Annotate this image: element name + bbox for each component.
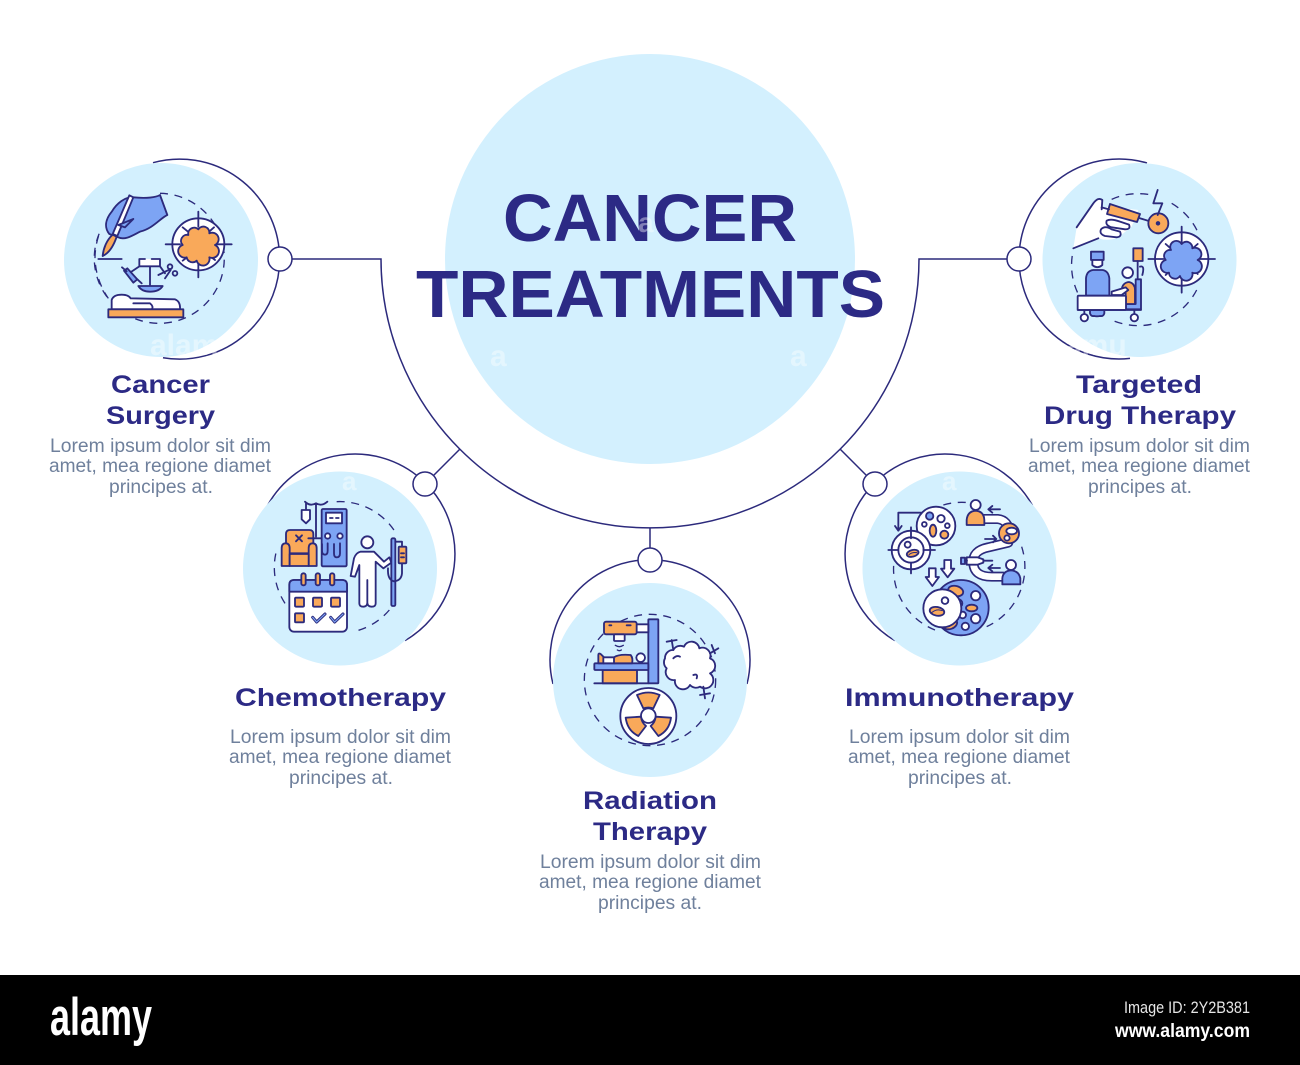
node: immunotherapy — [863, 472, 887, 496]
heading: cancer surgery: Cancer — [111, 371, 210, 399]
ring: cancer surgery — [153, 159, 280, 359]
icon: surgery — [94, 193, 232, 323]
ring: immunotherapy — [845, 454, 1032, 641]
node: chemotherapy — [413, 472, 437, 496]
watermark marks: a — [638, 207, 654, 238]
text block: radiation therapy: Lorem ipsum dolor sit dim — [540, 852, 761, 873]
text block: targeted drug therapy: Lorem ipsum dolor sit dim — [1029, 436, 1250, 457]
node: cancer surgery — [268, 247, 292, 271]
text block: radiation therapy: principes at. — [598, 893, 702, 914]
ring: targeted drug therapy — [1019, 159, 1147, 359]
heading: targeted drug therapy: Targeted — [1076, 371, 1202, 399]
text block: chemotherapy: Lorem ipsum dolor sit dim — [230, 727, 451, 748]
panel: targeted drug therapy — [1007, 159, 1251, 498]
watermark marks — [150, 207, 1127, 496]
watermark marks: a — [490, 340, 507, 373]
connector arc with branches — [292, 259, 1007, 548]
text block: radiation therapy — [539, 852, 762, 914]
text block: targeted drug therapy — [1028, 436, 1251, 498]
text block: immunotherapy: amet, mea regione diamet — [848, 747, 1071, 768]
icon: immunotherapy — [888, 500, 1025, 635]
badge: immunotherapy — [862, 472, 1056, 666]
title — [416, 181, 885, 332]
title: TREATMENTS — [416, 257, 885, 332]
heading: immunotherapy: Immunotherapy — [845, 684, 1074, 712]
badge: radiation therapy — [553, 583, 747, 777]
icon: targeted therapy — [1072, 190, 1215, 326]
watermark marks: amu — [1065, 329, 1127, 362]
node: radiation therapy — [638, 548, 662, 572]
heading: cancer surgery — [106, 371, 215, 430]
text block: immunotherapy: Lorem ipsum dolor sit dim — [849, 727, 1070, 748]
text block: cancer surgery: Lorem ipsum dolor sit dim — [50, 436, 271, 457]
text block: targeted drug therapy: amet, mea regione diamet — [1028, 456, 1251, 477]
badge: cancer surgery — [64, 163, 258, 357]
heading: targeted drug therapy: Drug Therapy — [1044, 402, 1236, 430]
text block: chemotherapy: principes at. — [289, 768, 393, 789]
node: targeted drug therapy — [1007, 247, 1031, 271]
text block: radiation therapy: amet, mea regione diamet — [539, 872, 762, 893]
heading: cancer surgery: Surgery — [106, 402, 215, 430]
watermark marks: a — [942, 466, 957, 496]
image id: Image ID: 2Y2B381 — [1124, 998, 1250, 1017]
footer bar — [0, 975, 1300, 1065]
footer logo: alamy — [50, 988, 152, 1047]
text block: chemotherapy: amet, mea regione diamet — [229, 747, 452, 768]
heading: radiation therapy: Therapy — [593, 818, 707, 846]
panel: cancer surgery — [49, 159, 292, 498]
icon: radiation — [584, 614, 718, 746]
watermark marks: a — [342, 466, 357, 496]
panel: radiation therapy — [539, 548, 762, 914]
website: www.alamy.com — [1114, 1021, 1250, 1042]
heading: targeted drug therapy — [1044, 371, 1236, 430]
watermark marks: alam — [150, 329, 218, 362]
heading: radiation therapy: Radiation — [583, 787, 717, 815]
text block: chemotherapy — [229, 727, 452, 789]
ring: chemotherapy — [268, 454, 455, 641]
text block: cancer surgery: amet, mea regione diamet — [49, 456, 272, 477]
badge: chemotherapy — [243, 472, 437, 666]
text block: targeted drug therapy: principes at. — [1088, 477, 1192, 498]
heading: chemotherapy: Chemotherapy — [235, 684, 446, 712]
panel: immunotherapy — [845, 454, 1074, 789]
title: CANCER — [503, 181, 797, 256]
watermark marks: a — [790, 340, 807, 373]
badge: targeted drug therapy — [1042, 163, 1236, 357]
text block: cancer surgery: principes at. — [109, 477, 213, 498]
icon: chemo — [274, 502, 406, 632]
text block: immunotherapy — [848, 727, 1071, 789]
central title circle — [445, 54, 855, 464]
text block: immunotherapy: principes at. — [908, 768, 1012, 789]
ring: radiation therapy — [550, 560, 750, 684]
panel: chemotherapy — [229, 454, 455, 789]
text block: cancer surgery — [49, 436, 272, 498]
heading: radiation therapy — [583, 787, 717, 846]
